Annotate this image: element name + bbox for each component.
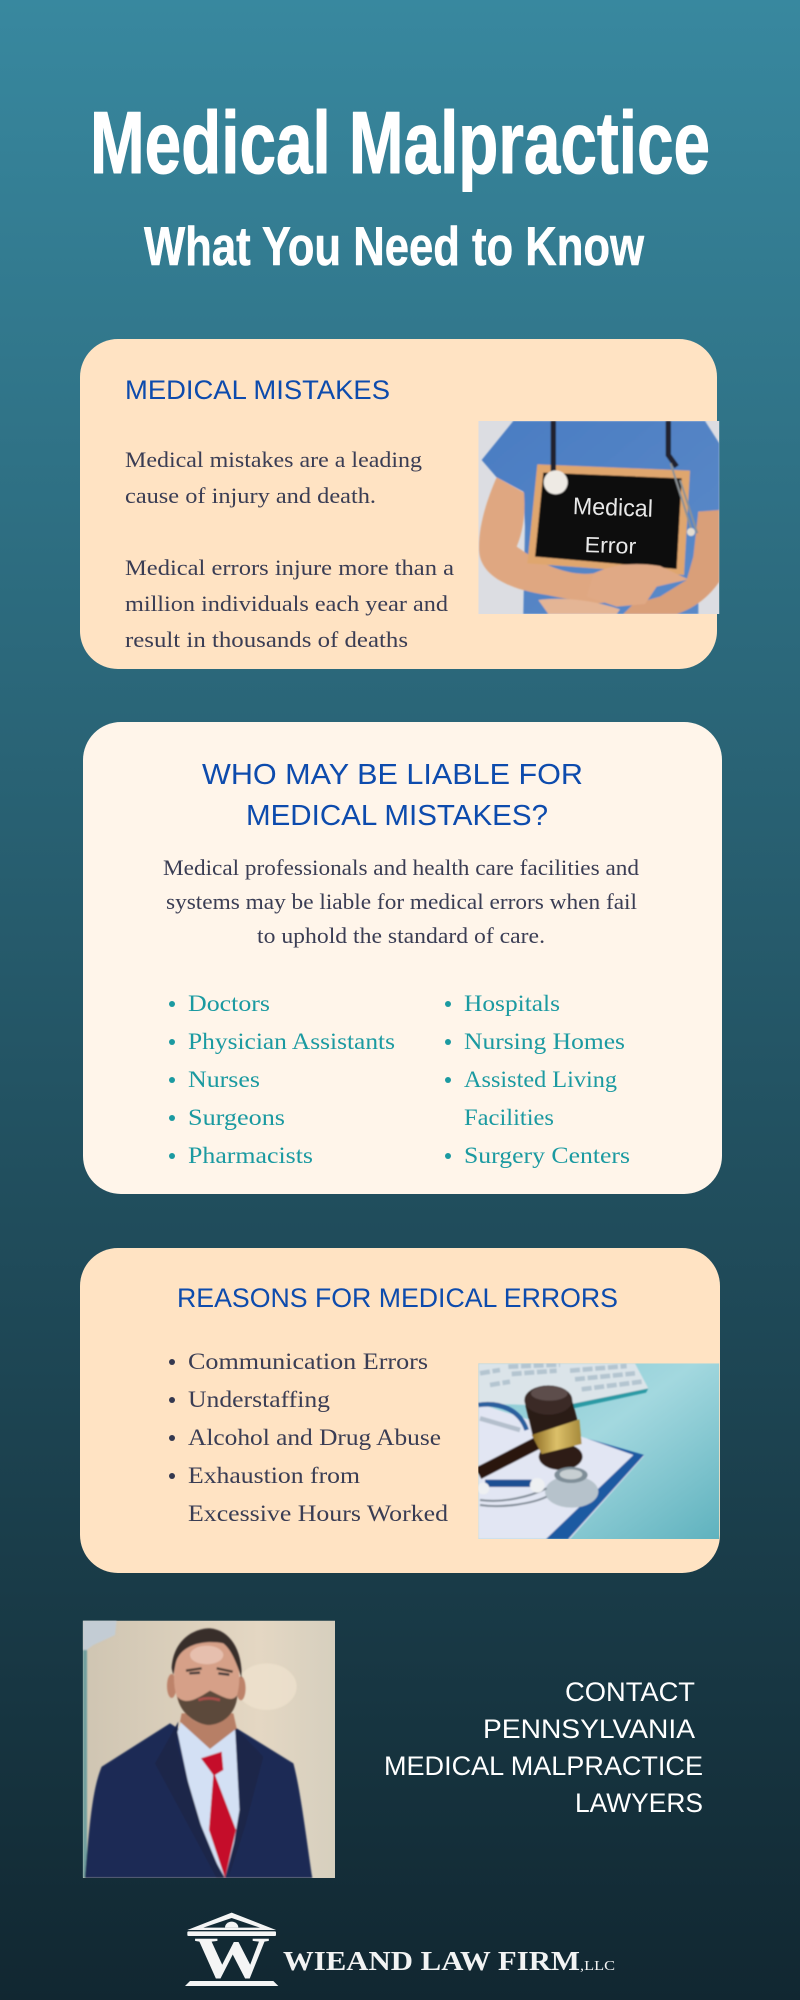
wordmark: ,LLC bbox=[580, 1959, 615, 1974]
list: reasons: Excessive Hours Worked bbox=[188, 1501, 449, 1526]
text block: liability intro: systems may be liable for medical errors when fail bbox=[166, 889, 637, 914]
panel: medical mistakes bbox=[80, 339, 719, 669]
list: reasons: Understaffing bbox=[188, 1387, 331, 1412]
list: facilities: Facilities bbox=[464, 1105, 554, 1130]
list: facilities: Surgery Centers bbox=[464, 1143, 630, 1168]
image: gavel and stethoscope on clipboard bbox=[477, 1363, 719, 1539]
list: facilities: Nursing Homes bbox=[464, 1029, 625, 1054]
wordmark: WIEAND LAW FIRM bbox=[283, 1946, 580, 1976]
logo: Wieand Law Firm bbox=[185, 1913, 615, 1990]
panel background bbox=[80, 1248, 720, 1573]
text block: liability intro bbox=[163, 855, 639, 948]
photo: attorney portrait bbox=[83, 1621, 335, 1878]
contact text: PENNSYLVANIA bbox=[483, 1714, 695, 1744]
list: individuals: Nurses bbox=[188, 1067, 260, 1092]
heading: who may be liable: MEDICAL MISTAKES? bbox=[246, 800, 548, 832]
heading: who may be liable: WHO MAY BE LIABLE FOR bbox=[202, 759, 583, 791]
list: reasons bbox=[169, 1349, 449, 1526]
panel background bbox=[83, 722, 722, 1194]
heading: who may be liable bbox=[202, 759, 583, 832]
list: reasons: Alcohol and Drug Abuse bbox=[188, 1425, 441, 1450]
list: individuals: Physician Assistants bbox=[188, 1029, 395, 1054]
list: facilities: Assisted Living bbox=[464, 1067, 618, 1092]
contact text: MEDICAL MALPRACTICE bbox=[384, 1751, 703, 1781]
list: reasons: Exhaustion from bbox=[188, 1463, 360, 1488]
contact text bbox=[384, 1677, 703, 1818]
icon: courthouse bbox=[185, 1913, 278, 1990]
text block: medical mistakes: Medical mistakes are a leading bbox=[125, 447, 422, 472]
heading: reasons: REASONS FOR MEDICAL ERRORS bbox=[177, 1283, 618, 1313]
list: individuals: Pharmacists bbox=[188, 1143, 313, 1168]
text block: liability intro: to uphold the standard of care. bbox=[257, 923, 545, 948]
list: facilities: Hospitals bbox=[464, 991, 560, 1016]
list: facilities bbox=[445, 991, 630, 1168]
text block: medical mistakes: cause of injury and death. bbox=[125, 483, 376, 508]
image: nurse holding medical error chalkboard bbox=[478, 421, 719, 614]
title: What You Need to Know bbox=[144, 215, 644, 277]
text block: medical mistakes: Medical errors injure more than a bbox=[125, 555, 454, 580]
text block: liability intro: Medical professionals and health care facilities and bbox=[163, 855, 639, 880]
contact text: CONTACT bbox=[565, 1677, 695, 1707]
list: individuals bbox=[169, 991, 395, 1168]
title bbox=[90, 93, 710, 277]
text block: medical mistakes: result in thousands of deaths bbox=[125, 627, 408, 652]
contact text: LAWYERS bbox=[575, 1788, 703, 1818]
text block: medical mistakes: million individuals each year and bbox=[125, 591, 448, 616]
text block: medical mistakes bbox=[125, 447, 454, 652]
panel: who may be liable bbox=[83, 722, 722, 1194]
panel: reasons for medical errors bbox=[80, 1248, 720, 1573]
icon: courthouse: W bbox=[194, 1924, 270, 1990]
panel background bbox=[80, 339, 717, 669]
list: individuals: Surgeons bbox=[188, 1105, 285, 1130]
list: reasons: Communication Errors bbox=[188, 1349, 428, 1374]
list: individuals: Doctors bbox=[188, 991, 270, 1016]
heading: medical mistakes: MEDICAL MISTAKES bbox=[125, 375, 390, 405]
image: nurse holding medical error chalkboard: Medical bbox=[572, 493, 653, 523]
image: nurse holding medical error chalkboard: Error bbox=[584, 532, 637, 559]
